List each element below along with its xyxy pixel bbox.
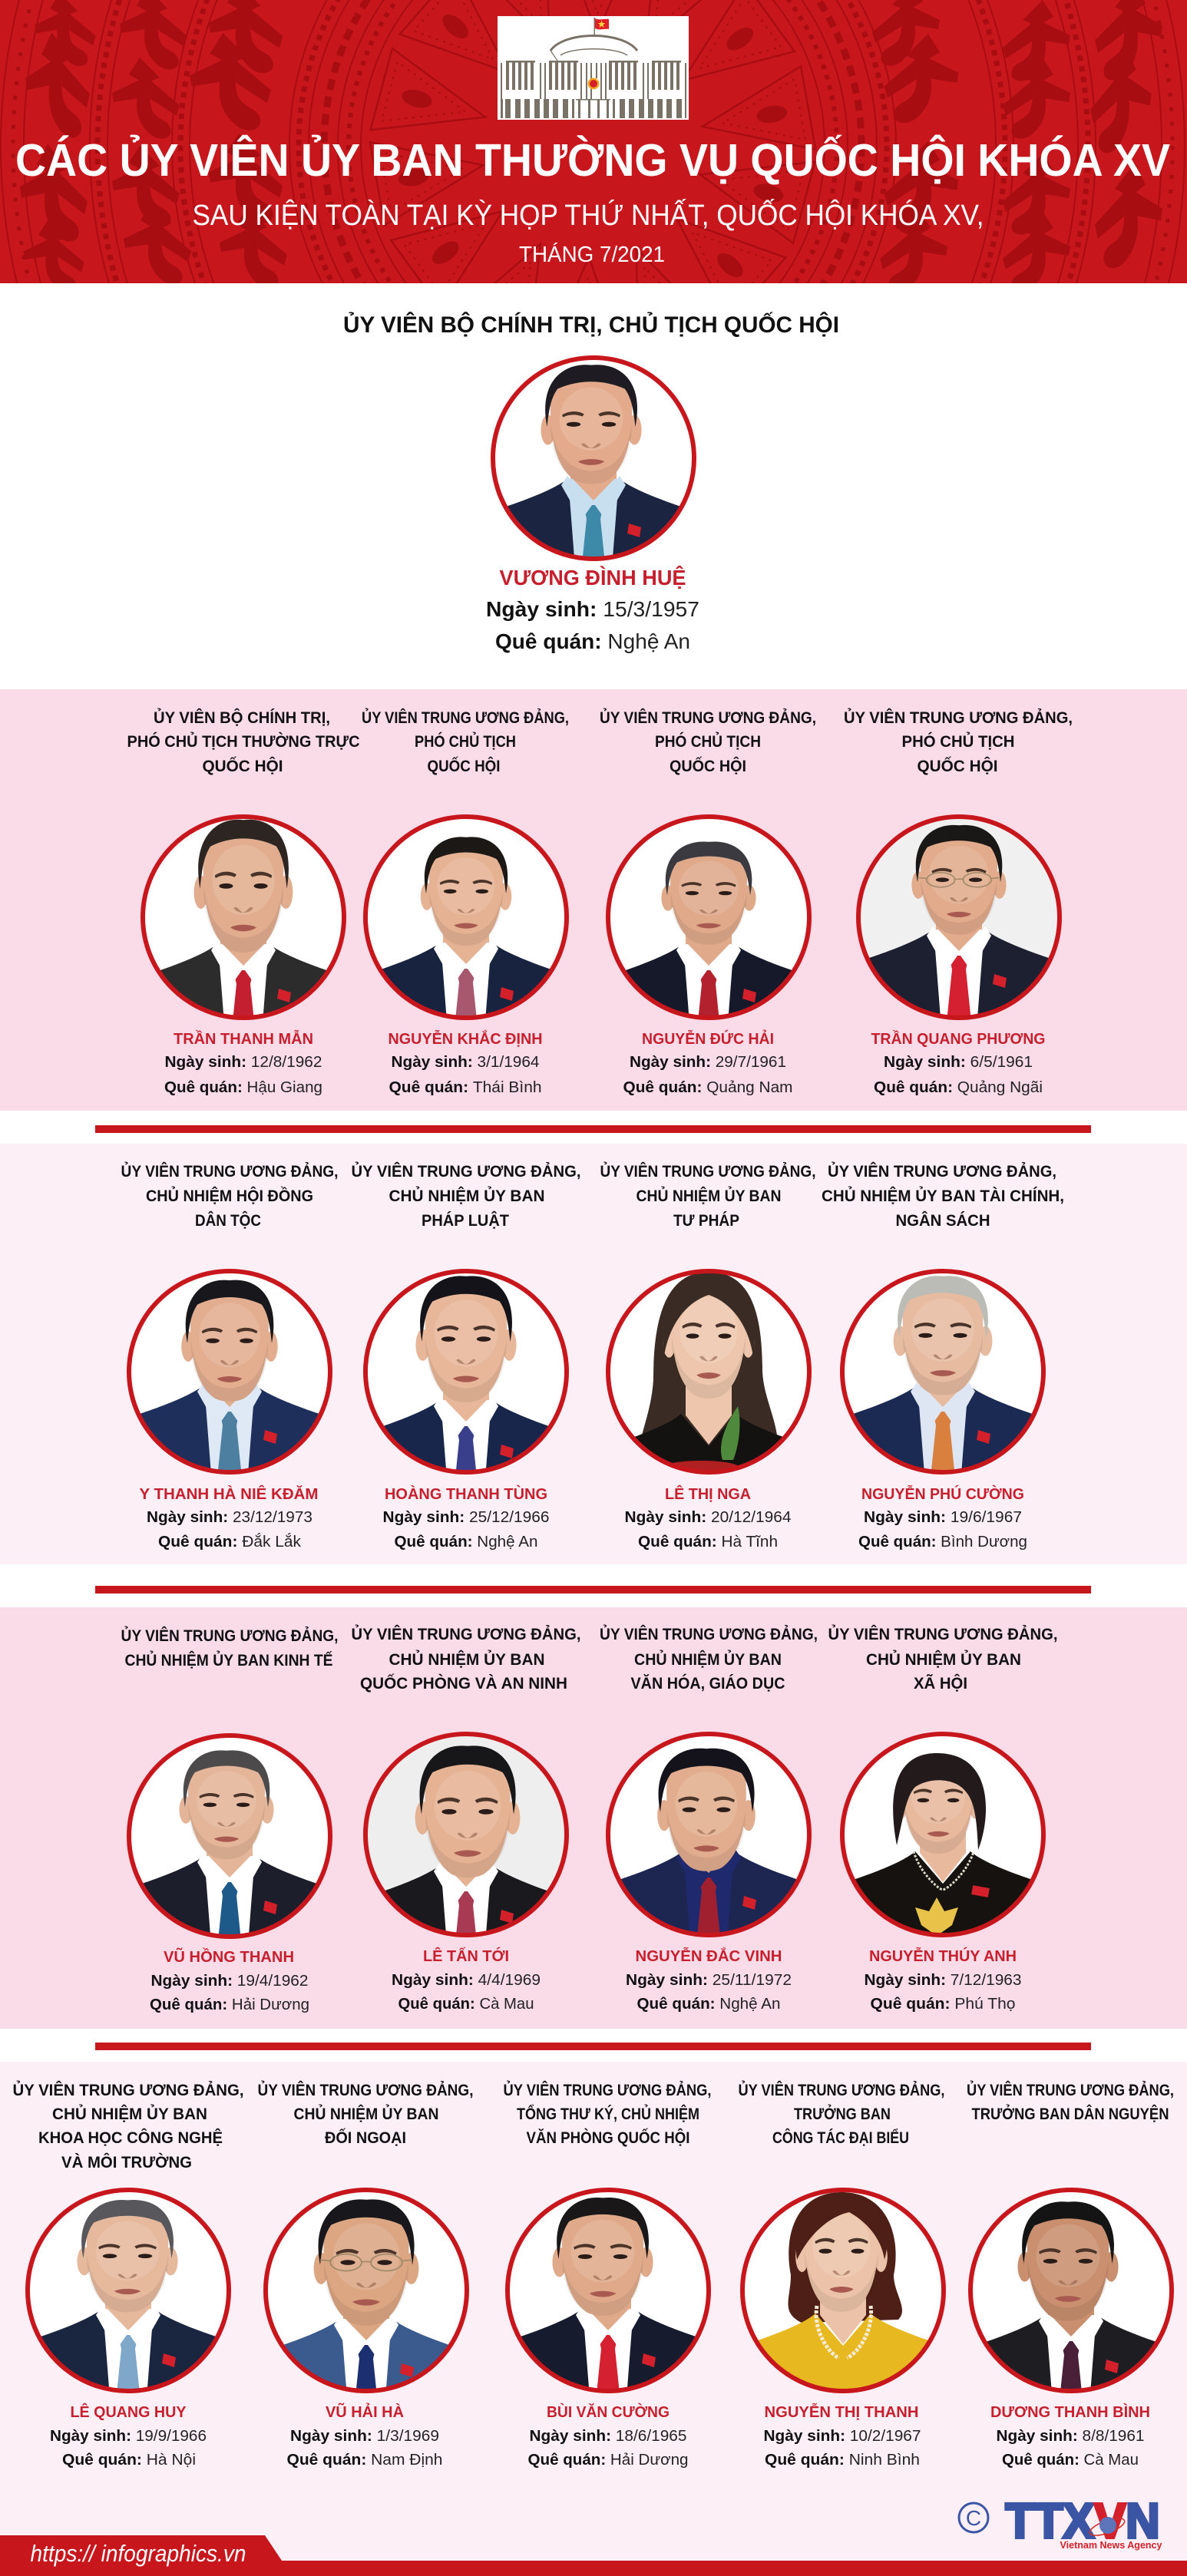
portrait [840, 1269, 1046, 1475]
subtitle: SAU KIỆN TOÀN TẠI KỲ HỌP THỨ NHẤT, QUỐC HỘI KHÓA XV, [192, 197, 984, 232]
role: ỦY VIÊN TRUNG ƯƠNG ĐẢNG, [12, 2081, 244, 2099]
hometown: Quê quán: Hậu Giang [164, 1079, 322, 1096]
portrait [336, 1734, 597, 2003]
role: PHÁP LUẬT [422, 1211, 509, 1230]
icon: copyright [959, 2503, 988, 2532]
portrait [478, 2190, 739, 2447]
role [600, 1625, 818, 1693]
birth date: Ngày sinh: 7/12/1963 [865, 1972, 1021, 1989]
role: CHỦ NHIỆM ỦY BAN [634, 1650, 782, 1669]
name: LÊ TẤN TỚI [423, 1947, 509, 1965]
member: Nguyễn Đắc Vinh [578, 1625, 839, 2013]
role: TƯ PHÁP [673, 1212, 739, 1230]
hometown: Quê quán: Cà Mau [398, 1996, 534, 2013]
member: Nguyễn Thúy Anh [812, 1625, 1073, 2013]
member: Bùi Văn Cường [478, 2081, 739, 2469]
name: Y THANH HÀ NIÊ KĐĂM [140, 1485, 318, 1503]
birth date: Ngày sinh: 25/11/1972 [626, 1972, 792, 1989]
member: Nguyễn Khắc Định [362, 708, 569, 1095]
birth date: Ngày sinh: 3/1/1964 [392, 1054, 539, 1071]
name: VŨ HẢI HÀ [326, 2403, 404, 2421]
member: Y Thanh Hà Niê Kđăm [121, 1162, 338, 1550]
role: ỦY VIÊN TRUNG ƯƠNG ĐẢNG, [121, 1627, 338, 1645]
hometown: Quê quán: Ninh Bình [765, 2452, 920, 2469]
role [600, 1162, 815, 1230]
role: ỦY VIÊN TRUNG ƯƠNG ĐẢNG, [739, 2081, 944, 2099]
panel: committee chairs band 2 [0, 1607, 1187, 2029]
role: CHỦ NHIỆM ỦY BAN [52, 2105, 207, 2123]
role: QUỐC HỘI [917, 757, 998, 775]
role: VĂN PHÒNG QUỐC HỘI [527, 2129, 689, 2147]
portrait [713, 2190, 974, 2452]
role [739, 2081, 944, 2147]
role [121, 1162, 338, 1230]
birth date: Ngày sinh: 8/8/1961 [997, 2428, 1144, 2445]
role: CÔNG TÁC ĐẠI BIỂU [772, 2129, 909, 2147]
role: ỦY VIÊN TRUNG ƯƠNG ĐẢNG, [121, 1162, 338, 1181]
role: CHỦ NHIỆM ỦY BAN [636, 1187, 782, 1205]
name: NGUYỄN PHÚ CƯỜNG [861, 1485, 1024, 1503]
role: VĂN HÓA, GIÁO DỤC [631, 1674, 785, 1693]
role [822, 1162, 1064, 1230]
role [828, 1625, 1058, 1693]
footer bar [0, 2535, 1187, 2576]
role: ỦY VIÊN TRUNG ƯƠNG ĐẢNG, [600, 708, 816, 727]
birth date: Ngày sinh: 12/8/1962 [164, 1054, 322, 1071]
role: ỦY VIÊN TRUNG ƯƠNG ĐẢNG, [362, 708, 569, 727]
name: TRẦN THANH MẪN [174, 1030, 313, 1048]
icon: copyright: C [966, 2506, 981, 2530]
member: Trần Thanh Mẫn [127, 708, 359, 1095]
birth date: Ngày sinh: 19/6/1967 [864, 1509, 1022, 1526]
role: CHỦ NHIỆM ỦY BAN [389, 1650, 545, 1669]
member: Lê Thị Nga [600, 1162, 815, 1550]
hometown: Quê quán: Bình Dương [858, 1534, 1027, 1551]
hometown: Quê quán: Hà Tĩnh [638, 1534, 778, 1551]
panel: chairman [343, 312, 839, 653]
name: LÊ QUANG HUY [71, 2403, 187, 2421]
birth date: Ngày sinh: 23/12/1973 [147, 1509, 312, 1526]
name: VŨ HỒNG THANH [164, 1947, 294, 1966]
role: CHỦ NHIỆM ỦY BAN [866, 1650, 1021, 1669]
panel: vice chairs band [0, 689, 1187, 1111]
panel: committee chairs band 1 [0, 1144, 1187, 1564]
role: CHỦ NHIỆM HỘI ĐỒNG [146, 1187, 313, 1205]
icon: national emblem [588, 78, 599, 89]
role: PHÓ CHỦ TỊCH [901, 732, 1015, 751]
name: NGUYỄN KHẮC ĐỊNH [389, 1029, 542, 1048]
role: ĐỐI NGOẠI [325, 2129, 406, 2147]
role: ỦY VIÊN TRUNG ƯƠNG ĐẢNG, [844, 708, 1073, 727]
role: ỦY VIÊN TRUNG ƯƠNG ĐẢNG, [600, 1625, 818, 1643]
member: Nguyễn Đức Hải [600, 708, 815, 1095]
hometown: Quê quán: Phú Thọ [871, 1996, 1015, 2013]
hometown: Quê quán: Quảng Ngãi [874, 1079, 1043, 1096]
birth date: Ngày sinh: 29/7/1961 [630, 1054, 786, 1071]
hometown: Quê quán: Hải Dương [528, 2452, 689, 2469]
role: CHỦ NHIỆM ỦY BAN [389, 1187, 545, 1205]
icon: dome [551, 35, 637, 61]
portrait: Vương Đình Huệ [491, 355, 696, 561]
wordmark: TTXVN [1006, 2493, 1159, 2548]
birth date: Ngày sinh: 20/12/1964 [625, 1509, 791, 1526]
name: HOÀNG THANH TÙNG [385, 1485, 547, 1503]
portrait [127, 1733, 332, 1939]
role: CHỦ NHIỆM ỦY BAN [293, 2105, 439, 2123]
portrait [0, 2190, 259, 2447]
member: Nguyễn Phú Cường [812, 1162, 1073, 1551]
role: ỦY VIÊN TRUNG ƯƠNG ĐẢNG, [828, 1162, 1056, 1181]
role: ỦY VIÊN TRUNG ƯƠNG ĐẢNG, [504, 2081, 711, 2099]
role [121, 1627, 338, 1669]
name: BÙI VĂN CƯỜNG [547, 2403, 670, 2421]
hometown: Quê quán: Nghệ An [395, 1534, 537, 1551]
member: Vũ Hải Hà [236, 2081, 497, 2469]
birth date: Ngày sinh: 18/6/1965 [530, 2428, 686, 2445]
name: DƯƠNG THANH BÌNH [990, 2403, 1150, 2421]
role [352, 1625, 580, 1693]
birth date: Ngày sinh: 6/5/1961 [884, 1054, 1033, 1071]
portrait [363, 814, 569, 1020]
icon: columns [501, 61, 686, 118]
member: Dương Thanh Bình [941, 2081, 1187, 2469]
role: CHỦ NHIỆM ỦY BAN TÀI CHÍNH, [822, 1187, 1064, 1205]
role: ỦY VIÊN TRUNG ƯƠNG ĐẢNG, [352, 1625, 580, 1643]
role: NGÂN SÁCH [895, 1211, 990, 1230]
name: VƯƠNG ĐÌNH HUỆ [499, 566, 686, 590]
role [127, 708, 359, 775]
member: Trần Quang Phương [845, 708, 1072, 1095]
portrait [127, 1269, 332, 1475]
role: XÃ HỘI [914, 1674, 967, 1693]
role: ỦY VIÊN TRUNG ƯƠNG ĐẢNG, [828, 1625, 1058, 1643]
role: TRƯỞNG BAN [794, 2105, 891, 2123]
member: Vũ Hồng Thanh [121, 1626, 338, 2013]
member: Nguyễn Thị Thanh [713, 2081, 974, 2469]
hometown: Quê quán: Nghệ An [637, 1996, 780, 2013]
name: NGUYỄN THỊ THANH [765, 2403, 918, 2421]
role: QUỐC HỘI [670, 757, 746, 775]
name: TRẦN QUANG PHƯƠNG [871, 1030, 1046, 1048]
role [12, 2081, 244, 2171]
portrait [141, 814, 346, 1020]
name: LÊ THỊ NGA [665, 1485, 751, 1503]
birth date: Ngày sinh: 19/9/1966 [50, 2428, 207, 2445]
role: PHÓ CHỦ TỊCH [415, 732, 516, 751]
role: QUỐC PHÒNG VÀ AN NINH [360, 1674, 567, 1693]
role [504, 2081, 711, 2147]
hometown: Quê quán: Đắk Lắk [158, 1533, 302, 1551]
birth date: Ngày sinh: 19/4/1962 [150, 1973, 309, 1990]
portrait [812, 1734, 1073, 1990]
role: ỦY VIÊN BỘ CHÍNH TRỊ, [154, 708, 330, 727]
hometown: Quê quán: Cà Mau [1002, 2452, 1139, 2469]
role: QUỐC HỘI [203, 757, 283, 775]
portrait [606, 814, 812, 1020]
role [258, 2081, 473, 2147]
portrait [363, 1269, 569, 1475]
birth date: Ngày sinh: 1/3/1969 [290, 2428, 439, 2445]
role: VÀ MÔI TRƯỜNG [61, 2153, 192, 2171]
birth date: Ngày sinh: 4/4/1969 [392, 1972, 541, 1989]
role [967, 2081, 1174, 2123]
logo: TTXVN [959, 2493, 1162, 2551]
role: DÂN TỘC [195, 1211, 261, 1230]
portrait [856, 814, 1062, 1020]
birth date: Ngày sinh: 15/3/1957 [486, 597, 699, 621]
hometown: Quê quán: Nghệ An [495, 629, 690, 653]
website url: https:// infographics.vn [31, 2540, 246, 2567]
drum pattern background [0, 0, 1185, 283]
logo: National Assembly building [498, 16, 689, 120]
icon: globe [1088, 2515, 1126, 2539]
role: TỔNG THƯ KÝ, CHỦ NHIỆM [517, 2105, 699, 2123]
role [844, 708, 1073, 775]
name: NGUYỄN THÚY ANH [869, 1947, 1017, 1965]
role [362, 708, 569, 775]
member: Hoàng Thanh Tùng [352, 1162, 580, 1550]
birth date: Ngày sinh: 10/2/1967 [763, 2428, 921, 2445]
role: PHÓ CHỦ TỊCH THƯỜNG TRỰC [127, 732, 359, 751]
role: ỦY VIÊN TRUNG ƯƠNG ĐẢNG, [600, 1162, 815, 1181]
hometown: Quê quán: Thái Bình [389, 1079, 542, 1096]
role: ỦY VIÊN TRUNG ƯƠNG ĐẢNG, [352, 1162, 580, 1181]
role [352, 1162, 580, 1230]
icon: flag [594, 18, 609, 36]
member: Lê Quang Huy [0, 2081, 259, 2469]
birth date: Ngày sinh: 25/12/1966 [382, 1509, 550, 1526]
role: ỦY VIÊN TRUNG ƯƠNG ĐẢNG, [258, 2081, 473, 2099]
heading: chairman role: ỦY VIÊN BỘ CHÍNH TRỊ, CHỦ TỊCH QUỐC HỘI [343, 312, 839, 338]
hometown: Quê quán: Quảng Nam [623, 1079, 792, 1096]
portrait [941, 2190, 1187, 2453]
tagline: Vietnam News Agency [1060, 2539, 1162, 2551]
role: PHÓ CHỦ TỊCH [655, 732, 761, 751]
panel: committee heads band [0, 2062, 1187, 2576]
hometown: Quê quán: Nam Định [287, 2452, 442, 2469]
hometown: Quê quán: Hải Dương [150, 1996, 309, 2013]
role [600, 708, 816, 775]
portrait [578, 1734, 839, 1990]
name: NGUYỄN ĐỨC HẢI [642, 1029, 774, 1048]
name: NGUYỄN ĐẮC VINH [636, 1947, 782, 1965]
date line: THÁNG 7/2021 [519, 242, 665, 267]
role: CHỦ NHIỆM ỦY BAN KINH TẾ [124, 1651, 333, 1669]
header banner [0, 0, 1187, 283]
portrait [606, 1269, 812, 1475]
role: KHOA HỌC CÔNG NGHỆ [38, 2129, 223, 2147]
portrait [236, 2190, 497, 2457]
hometown: Quê quán: Hà Nội [62, 2452, 196, 2469]
role: QUỐC HỘI [427, 757, 501, 775]
member: Lê Tấn Tới [336, 1625, 597, 2013]
